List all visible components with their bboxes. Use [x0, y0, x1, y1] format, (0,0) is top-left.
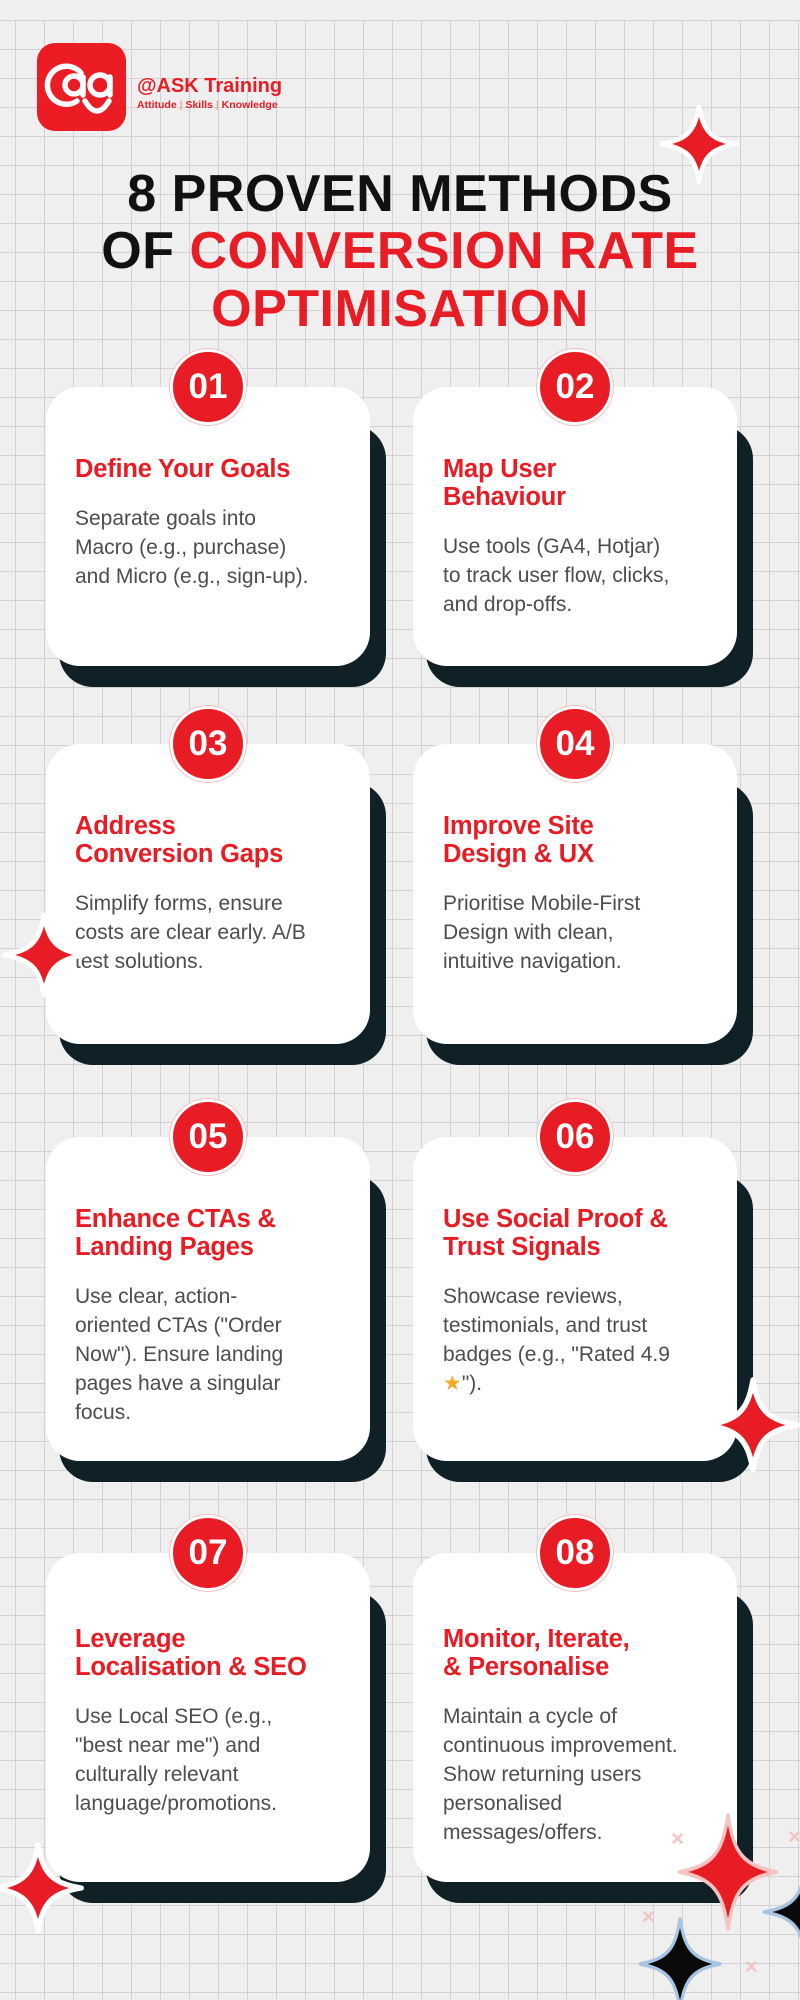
badge 07: 07 [189, 1533, 227, 1572]
icon: star bottom right red [678, 1813, 778, 1931]
badge 01 [170, 349, 246, 425]
panel: 05: Now"). Ensure landing [75, 1343, 283, 1366]
badge 06: 06 [556, 1117, 594, 1156]
panel: 08: continuous improvement. [443, 1734, 678, 1757]
tagline: Attitude | Skills | Knowledge [137, 99, 278, 111]
brand name: @ASK Training [137, 75, 282, 97]
panel: 01: Macro (e.g., purchase) [75, 536, 286, 559]
panel: 03: test solutions. [75, 950, 203, 973]
panel: 04: intuitive navigation. [443, 950, 622, 973]
badge 06 [537, 1099, 613, 1175]
icon: star left [2, 912, 86, 998]
panel: 07: culturally relevant [75, 1763, 238, 1786]
panel: 02 [413, 348, 753, 687]
panel: 08: Monitor, Iterate, [443, 1625, 629, 1653]
panel: 01: and Micro (e.g., sign-up). [75, 565, 308, 588]
panel: 01: Define Your Goals [75, 455, 290, 483]
panel: 05: oriented CTAs ("Order [75, 1314, 282, 1337]
title: OPTIMISATION [211, 280, 589, 338]
panel: 02: Use tools (GA4, Hotjar) [443, 535, 660, 558]
panel: 07 [46, 1514, 386, 1903]
panel: 04: Improve Site [443, 812, 594, 840]
badge 05 [170, 1099, 246, 1175]
badge 08 [537, 1515, 613, 1591]
badge 03: 03 [189, 724, 227, 763]
panel: 03: Address [75, 812, 176, 840]
panel: 08: personalised [443, 1792, 562, 1815]
panel: 07: language/promotions. [75, 1792, 277, 1815]
title [101, 165, 699, 338]
title: OF CONVERSION RATE [101, 222, 699, 280]
title: 8 PROVEN METHODS [127, 165, 673, 223]
panel: 01 [46, 348, 386, 687]
icon: star right middle [720, 1377, 800, 1472]
panel: 02: Behaviour [443, 483, 566, 511]
badge 04: 04 [556, 724, 594, 763]
panel: 08: messages/offers. [443, 1821, 603, 1844]
icon: star top right [660, 104, 738, 184]
panel: 05: focus. [75, 1401, 131, 1424]
panel: 06 [413, 1098, 753, 1482]
decorative x marks: × [642, 1904, 655, 1929]
decorative x marks: × [745, 1954, 758, 1979]
panel: 03: costs are clear early. A/B [75, 921, 306, 944]
badge 03 [170, 706, 246, 782]
decorative x marks [642, 1824, 800, 1979]
panel: 02: and drop-offs. [443, 593, 572, 616]
panel: 08: Show returning users [443, 1763, 641, 1786]
panel: 02: to track user flow, clicks, [443, 564, 669, 587]
panel: 06: Trust Signals [443, 1233, 601, 1261]
panel: 06: Use Social Proof & [443, 1205, 668, 1233]
panel: 03: Conversion Gaps [75, 840, 283, 868]
panel: 05 [46, 1098, 386, 1482]
icon: star bottom left [0, 1842, 84, 1934]
icon: star bottom black [638, 1917, 722, 2000]
icon: logo mark [37, 43, 126, 131]
badge 01: 01 [189, 367, 227, 406]
decorative x marks: × [671, 1826, 684, 1851]
panel: 02: Map User [443, 455, 556, 483]
icon: star right edge black [762, 1885, 800, 1939]
logo [37, 43, 282, 131]
badge 07 [170, 1515, 246, 1591]
panel: 06: ★"). [443, 1372, 482, 1395]
panel: 07: Leverage [75, 1625, 185, 1653]
badge 05: 05 [189, 1117, 227, 1156]
badge 02: 02 [556, 367, 594, 406]
panel: 06: testimonials, and trust [443, 1314, 647, 1337]
panel: 04: Design & UX [443, 840, 594, 868]
panel: 05: Use clear, action- [75, 1285, 237, 1308]
panel: 05: Enhance CTAs & [75, 1205, 276, 1233]
panel: 07: Localisation & SEO [75, 1653, 307, 1681]
panel: 07: "best near me") and [75, 1734, 260, 1757]
panel: 06: Showcase reviews, [443, 1285, 623, 1308]
panel: 04: Prioritise Mobile-First [443, 892, 640, 915]
panel: 07: Use Local SEO (e.g., [75, 1705, 272, 1728]
badge 02 [537, 349, 613, 425]
panel: 05: Landing Pages [75, 1233, 254, 1261]
panel: 03: Simplify forms, ensure [75, 892, 283, 915]
panel: 08 [413, 1514, 753, 1903]
panel: 01: Separate goals into [75, 507, 256, 530]
panel: 03 [46, 705, 386, 1065]
panel: 05: pages have a singular [75, 1372, 280, 1395]
panel: 06: badges (e.g., "Rated 4.9 [443, 1343, 670, 1366]
panel: 04: Design with clean, [443, 921, 613, 944]
panel: 04 [413, 705, 753, 1065]
panel: 08: Maintain a cycle of [443, 1705, 617, 1728]
badge 04 [537, 706, 613, 782]
panel: 08: & Personalise [443, 1653, 609, 1681]
badge 08: 08 [556, 1533, 594, 1572]
